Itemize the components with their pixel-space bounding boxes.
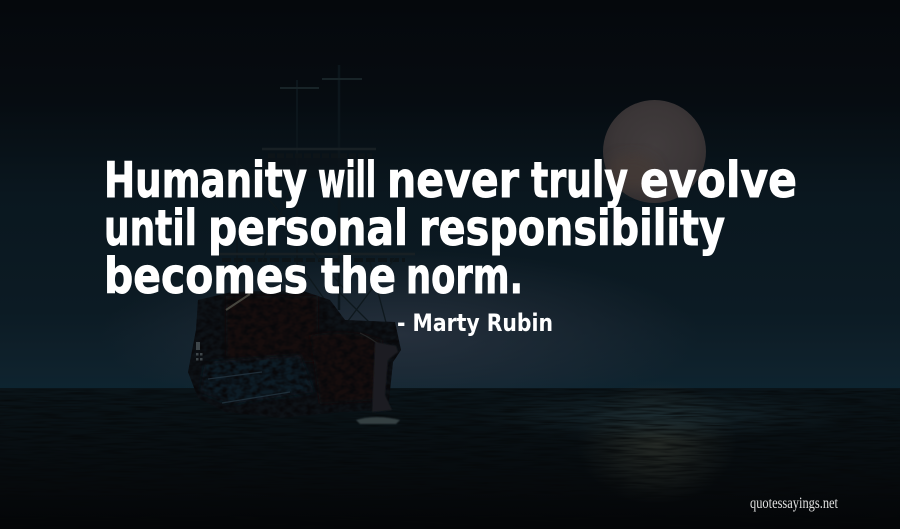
ship stern windows — [196, 342, 202, 360]
ship hull colour patches and texture — [188, 292, 399, 417]
quote line 3: norm. — [406, 248, 523, 305]
quote line 2 — [104, 200, 725, 257]
ship hull — [188, 290, 401, 418]
watermark: quotessayings.net — [750, 495, 838, 512]
quote line 2: responsibility — [419, 200, 725, 257]
quote line 2: until — [104, 200, 197, 257]
quote line 1: Humanity — [104, 152, 307, 209]
ship hull highlights — [208, 333, 388, 403]
ship pale spar — [226, 294, 250, 310]
ship sails in shadow — [264, 158, 374, 178]
quote line 3: the — [321, 248, 396, 305]
quote line 1: evolve — [640, 152, 797, 209]
quote line 1: never — [387, 152, 520, 209]
bow wave — [356, 417, 400, 424]
quote line 3: becomes — [104, 248, 308, 305]
quote text — [104, 152, 797, 305]
quote line 1: truly — [531, 152, 628, 209]
quote line 1: will — [318, 152, 376, 209]
ship bow carving — [372, 342, 398, 412]
ship rigging and masts — [216, 65, 415, 345]
quote line 1 — [104, 152, 797, 209]
author attribution: - Marty Rubin — [397, 309, 553, 337]
ship — [185, 65, 415, 424]
quote line 2: personal — [208, 200, 408, 257]
quote line 3 — [104, 248, 523, 305]
moon — [603, 100, 706, 203]
